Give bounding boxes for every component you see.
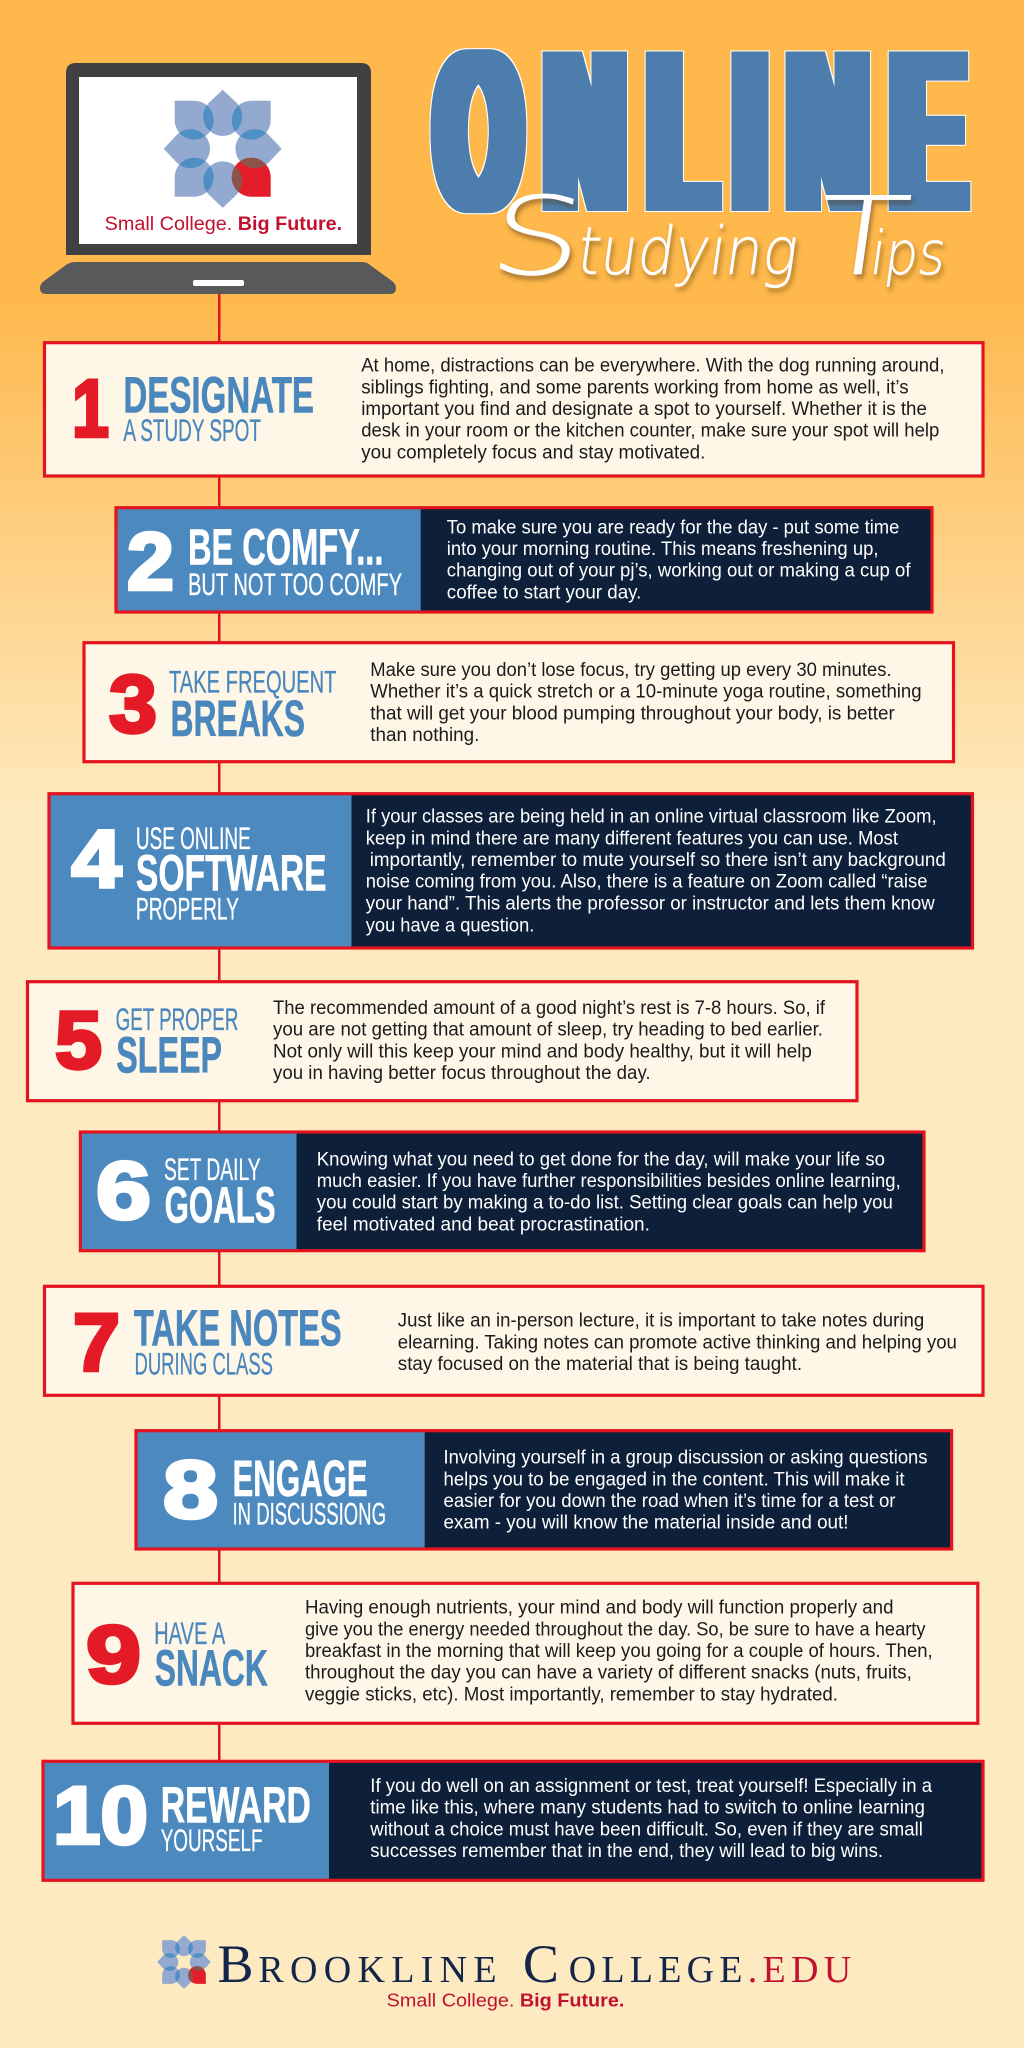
body text 9: throughout the day you can have a variety of different snacks (nuts, fruits, <box>305 1663 912 1684</box>
number 9: 9 <box>86 1610 141 1700</box>
body text 8: helps you to be engaged in the content. This will make it <box>444 1469 905 1490</box>
heading 4: USE ONLINE <box>136 820 251 856</box>
body text 10: time like this, where many students had to switch to online learning <box>370 1798 925 1819</box>
footer logo icon <box>157 1935 211 1989</box>
heading 6: SET DAILY <box>164 1151 261 1187</box>
panel 10: reward yourself <box>43 1761 983 1880</box>
heading 2: BE COMFY... <box>188 518 383 575</box>
body text 1: desk in your room or the kitchen counter, make sure your spot will help <box>361 421 939 442</box>
title: ONLINE: ONLINE <box>437 6 964 258</box>
panel 4: use online software properly: SOFTWARE <box>136 845 327 902</box>
body text 6: you could start by making a to-do list. Setting clear goals can help you <box>317 1193 893 1214</box>
body text 3 <box>370 660 922 746</box>
number 6: 6 <box>96 1146 151 1236</box>
heading 3: TAKE FREQUENT <box>169 664 336 700</box>
subtitle: Studying Tips: T <box>808 173 917 300</box>
panel 7: take notes during class <box>44 1286 983 1395</box>
panel 1: designate a study spot <box>44 343 983 476</box>
body text 9: breakfast in the morning that will keep you going for a couple of hours. Then, <box>305 1641 933 1662</box>
body text 2: coffee to start your day. <box>447 582 641 603</box>
body text 5: you are not getting that amount of sleep, try heading to bed earlier. <box>273 1020 823 1041</box>
body text 5: The recommended amount of a good night’s rest is 7-8 hours. So, if <box>273 998 826 1019</box>
panel 9: have a snack: SNACK <box>155 1640 268 1697</box>
panel 5: get proper sleep <box>28 982 857 1101</box>
panel 9: have a snack <box>73 1583 978 1723</box>
body text 5: Not only will this keep your mind and body healthy, but it will help <box>273 1041 812 1062</box>
heading 1: DESIGNATE <box>123 367 314 424</box>
number 5: 5 <box>55 995 102 1086</box>
subtitle: Studying Tips: S <box>482 173 592 300</box>
panel 3: take frequent breaks <box>84 643 954 762</box>
number 1: 1 <box>72 364 109 454</box>
body text 10 <box>369 1776 932 1862</box>
panel 4: use online software properly <box>49 794 972 948</box>
heading 5: GET PROPER <box>116 1001 238 1037</box>
body text 8 <box>444 1448 928 1534</box>
subtitle: Studying Tips: ips <box>866 219 951 289</box>
body text 4: you have a question. <box>366 915 534 936</box>
body text 9: veggie sticks, etc). Most importantly, remember to stay hydrated. <box>305 1684 838 1705</box>
body text 1 <box>361 356 944 464</box>
number 8: 8 <box>163 1444 218 1536</box>
panel 5: get proper sleep: SLEEP <box>116 1026 222 1083</box>
panel 6: set daily goals: GOALS <box>165 1176 276 1233</box>
body text 2: into your morning routine. This means freshening up, <box>447 539 878 560</box>
body text 4 <box>366 807 946 936</box>
body text 1: you completely focus and stay motivated. <box>361 443 705 464</box>
panel 2: be comfy <box>116 508 932 612</box>
number 4: 4 <box>72 814 122 905</box>
number 2: 2 <box>127 516 174 608</box>
body text 2 <box>447 517 911 603</box>
heading 10: REWARD <box>161 1777 311 1834</box>
body text 6 <box>317 1149 901 1235</box>
body text 3: Make sure you don’t lose focus, try getting up every 30 minutes. <box>370 660 892 681</box>
body text 1: siblings fighting, and some parents working from home as well, it’s <box>361 377 909 398</box>
body text 2: changing out of your pj’s, working out or making a cup of <box>447 561 911 582</box>
heading 9: HAVE A <box>154 1615 225 1651</box>
heading 7: TAKE NOTES <box>134 1300 342 1357</box>
body text 3: Whether it’s a quick stretch or a 10-minute yoga routine, something <box>370 682 922 703</box>
body text 4: noise coming from you. Also, there is a feature on Zoom called “raise <box>366 872 928 893</box>
laptop tagline: Small College. Big Future. <box>105 214 342 235</box>
body text 4: your hand”. This alerts the professor or instructor and lets them know <box>366 894 935 915</box>
body text 3: that will get your blood pumping throughout your body, is better <box>370 703 895 724</box>
body text 5 <box>273 998 826 1084</box>
panel 1: designate a study spot: A STUDY SPOT <box>123 412 261 448</box>
panel 4: use online software properly: PROPERLY <box>136 890 239 926</box>
body text 5: you in having better focus throughout the day. <box>273 1063 651 1084</box>
heading 8: ENGAGE <box>232 1450 368 1507</box>
panel 8: engage in discussion: IN DISCUSSIONG <box>232 1495 386 1531</box>
connector line <box>218 294 220 1762</box>
number 10: 10 <box>53 1770 148 1862</box>
body text 4: If your classes are being held in an online virtual classroom like Zoom, <box>366 807 937 828</box>
body text 2: To make sure you are ready for the day - put some time <box>447 517 899 538</box>
body text 10: successes remember that in the end, they will lead to big wins. <box>370 1841 883 1862</box>
footer wordmark: BROOKLINE COLLEGE.EDU <box>218 1934 856 1994</box>
body text 10: If you do well on an assignment or test, treat yourself! Especially in a <box>370 1776 932 1797</box>
body text 6: much easier. If you have further responsibilities besides online learning, <box>317 1171 901 1192</box>
body text 8: Involving yourself in a group discussion or asking questions <box>444 1448 928 1469</box>
body text 8: easier for you down the road when it’s time for a test or <box>444 1491 896 1512</box>
body text 7: elearning. Taking notes can promote active thinking and helping you <box>398 1332 957 1353</box>
panel 2: be comfy: BUT NOT TOO COMFY <box>188 566 402 602</box>
body text 4: importantly, remember to mute yourself so there isn’t any background <box>370 850 946 871</box>
panel 7: take notes during class: DURING CLASS <box>134 1345 273 1381</box>
logo on laptop screen <box>164 90 282 208</box>
footer tagline: Small College. Big Future. <box>387 1990 624 2010</box>
body text 9: Having enough nutrients, your mind and body will function properly and <box>305 1598 894 1619</box>
body text 1: At home, distractions can be everywhere. With the dog running around, <box>361 356 944 377</box>
panel 10: reward yourself: YOURSELF <box>161 1822 263 1858</box>
body text 9 <box>305 1598 933 1705</box>
panel 6: set daily goals <box>80 1132 924 1251</box>
subtitle: Studying Tips: tudying <box>573 212 804 290</box>
body text 8: exam - you will know the material inside and out! <box>444 1513 848 1534</box>
number 3: 3 <box>109 659 157 750</box>
body text 7: Just like an in-person lecture, it is important to take notes during <box>398 1311 924 1332</box>
laptop illustration <box>40 63 396 294</box>
body text 6: feel motivated and beat procrastination. <box>317 1214 650 1235</box>
panel 8: engage in discussion <box>136 1431 952 1549</box>
body text 7 <box>398 1311 957 1375</box>
body text 4: keep in mind there are many different features you can use. Most <box>366 828 899 849</box>
subtitle: Studying Tips <box>482 173 957 300</box>
panel 3: take frequent breaks: BREAKS <box>170 690 305 747</box>
body text 3: than nothing. <box>370 725 479 746</box>
body text 7: stay focused on the material that is being taught. <box>398 1354 802 1375</box>
number 7: 7 <box>73 1298 120 1388</box>
body text 1: important you find and designate a spot to yourself. Whether it is the <box>361 399 927 420</box>
body text 6: Knowing what you need to get done for the day, will make your life so <box>317 1149 885 1170</box>
body text 10: without a choice must have been difficult. So, even if they are small <box>369 1819 923 1840</box>
body text 9: give you the energy needed throughout the day. So, be sure to have a hearty <box>305 1619 926 1640</box>
